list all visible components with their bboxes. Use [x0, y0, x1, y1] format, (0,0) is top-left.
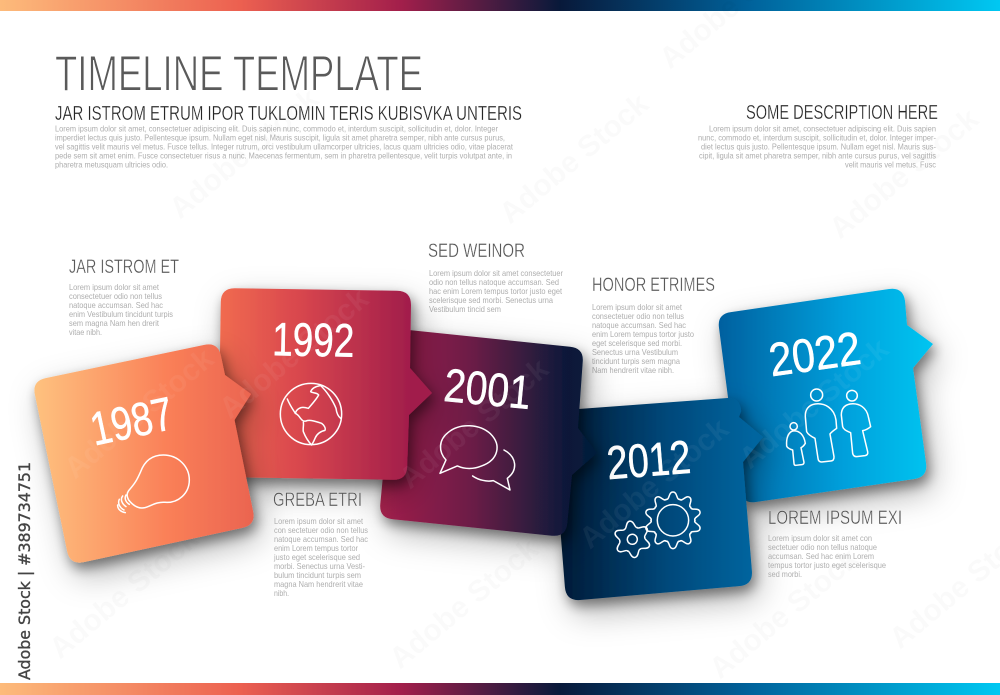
intro body text: vel sagittis velit mauris vel metus. Fusce tellus. Integer rutrum, orci vestibulum ullamcorper ultricies, lacus quam ultricies odio, vitae placerat [55, 142, 514, 152]
card 2022 [719, 289, 933, 502]
stock watermarks [58, 282, 895, 555]
stock watermarks: Adobe Stock [733, 332, 895, 475]
icon: globe [280, 383, 342, 445]
label: Sed Weinor: odio non tellus natoque accumsan. Sed [429, 277, 559, 287]
intro body text: pharetra metusquam ultricies odio. [55, 160, 168, 170]
label: Greba Etri: justo eget scelerisque sed [273, 552, 360, 562]
faint background watermarks: Adobe Stock [493, 87, 655, 230]
intro body text [55, 124, 514, 170]
year 1987: 1987 [85, 386, 178, 455]
label: Honor Etrimes: Senectus urna Vestibulum [592, 347, 678, 357]
label: Lorem Ipsum Exi: accumsan. Sed hac enim Lorem [768, 551, 874, 561]
year 2001: 2001 [442, 358, 533, 419]
intro body text: Lorem ipsum dolor sit amet, consectetuer adipiscing elit. Duis sapien nunc, commodo et, interdum suscipit, sollicitudin et, dolor. Integer [55, 124, 498, 134]
intro block [55, 102, 522, 170]
description body text: velit mauris vel metus. Fusc [845, 160, 936, 170]
stock watermarks: Adobe Stock [213, 282, 375, 425]
card 1987 [34, 344, 254, 563]
card shape 1987 [34, 344, 254, 563]
label: Honor Etrimes: Lorem ipsum dolor sit amet [592, 302, 683, 312]
label: Greba Etri [273, 490, 368, 598]
label: Greba Etri: natoque accumsan. Sed hac [274, 534, 368, 544]
label: Sed Weinor: SED WEINOR [428, 241, 525, 262]
faint background watermarks: Adobe Stock [823, 102, 985, 245]
label: Honor Etrimes: tincidunt turpis sem magna [592, 356, 680, 366]
card shape 1992 [218, 288, 432, 480]
label: Greba Etri: enim Lorem tempus tortor [274, 543, 358, 553]
card 2012 [552, 398, 763, 600]
label: Greba Etri: con sectetuer odio non tellus [274, 525, 368, 535]
card 2001 [380, 330, 597, 536]
label: Honor Etrimes: Nam hendrerit vitae nibh. [592, 365, 674, 375]
intro body text: pede sem sit amet enim. Fusce consectetuer risus a nunc. Maecenas fermentum, sem in pharetra pellentesque, velit turpis volutpat ante, in [55, 150, 512, 160]
label: Greba Etri: Lorem ipsum dolor sit amet [274, 516, 364, 526]
label: Jar Istrom Et: vitae nibh. [69, 327, 102, 337]
card shape 2022 [719, 289, 933, 502]
label: Lorem Ipsum Exi: LOREM IPSUM EXI [768, 508, 902, 529]
label: Jar Istrom Et: natoque accumsan. Sed hac [69, 300, 163, 310]
description body text: nunc, commodo et, interdum suscipit, sollicitudin et, dolor. Integer imper- [698, 132, 936, 142]
label: Jar Istrom Et: JAR ISTROM ET [69, 257, 179, 278]
description body text: Lorem ipsum dolor sit amet, consectetuer adipiscing elit. Duis sapien [709, 124, 936, 134]
label: Sed Weinor: scelerisque sed morbi. Senectus urna [429, 295, 553, 305]
icon: light bulb [118, 455, 189, 513]
icon: speech bubbles [440, 426, 515, 490]
intro body text: imperdiet lectus quis justo. Pellentesque ipsum. Nullam eget nisl. Mauris suscipit, ligula sit amet pharetra semper, nibh ante cursus purus, [55, 132, 505, 142]
icon: gears [611, 492, 702, 560]
label: Jar Istrom Et: Lorem ipsum dolor sit amet [69, 282, 160, 292]
intro subheading: JAR ISTROM ETRUM IPOR TUKLOMIN TERIS KUBISVKA UNTERIS [55, 102, 522, 125]
label: Lorem Ipsum Exi: tempus tortor justo eget scelerisque [768, 560, 886, 570]
faint background watermarks: Adobe Stock [163, 82, 325, 225]
label: Greba Etri: GREBA ETRI [273, 490, 362, 511]
faint background watermarks: Adobe Stock [43, 522, 205, 665]
label: Honor Etrimes: consectetuer odio non tellus [592, 311, 684, 321]
faint background watermarks: Adobe Stock [383, 532, 545, 675]
label: Lorem Ipsum Exi: sed morbi. [768, 569, 802, 579]
year 1992: 1992 [272, 312, 355, 367]
label: Jar Istrom Et [69, 257, 179, 337]
label: Honor Etrimes [592, 275, 715, 375]
label: Greba Etri: nibh. [274, 588, 289, 598]
title: TIMELINE TEMPLATE [55, 46, 423, 102]
description block [698, 101, 938, 170]
stock watermarks: Adobe Stock [393, 352, 555, 495]
label: Honor Etrimes: HONOR ETRIMES [592, 275, 715, 296]
card shape 2012 [552, 398, 763, 600]
label: Honor Etrimes: natoque accumsan. Sed hac [592, 320, 686, 330]
description body text [698, 124, 936, 170]
label: Sed Weinor: Vestibulum tincid sem [429, 304, 501, 314]
description body text: diet lectus quis justo. Pellentesque ipsum. Nullam eget nisl. Mauris sus- [701, 142, 936, 152]
label: Sed Weinor [428, 241, 563, 314]
label: Jar Istrom Et: consectetuer odio non tellus [69, 291, 162, 301]
top gradient bar [0, 0, 1000, 11]
year 2022: 2022 [765, 321, 864, 386]
label: Greba Etri: bulum tincidunt turpis sem [274, 570, 361, 580]
label: Lorem Ipsum Exi [768, 508, 902, 579]
label: Lorem Ipsum Exi: Lorem ipsum dolor sit amet con [768, 533, 872, 543]
faint background watermarks: Adobe Stock [703, 542, 865, 685]
label: Honor Etrimes: enim Lorem tempus tortor justo [592, 329, 694, 339]
card 1992 [218, 288, 432, 480]
stock watermarks: Adobe Stock [58, 342, 220, 485]
label: Greba Etri: morbi. Senectus urna Vesti- [274, 561, 365, 571]
stock id vertical text: Adobe Stock | #389734751 [15, 462, 34, 680]
label: Jar Istrom Et: enim Vestibulum tincidunt turpis [69, 309, 173, 319]
label: Honor Etrimes: eget scelerisque sed morbi. [592, 338, 682, 348]
bottom gradient bar [0, 683, 1000, 695]
year 2012: 2012 [605, 430, 693, 489]
label: Jar Istrom Et: sem magna Nam hen drerit [69, 318, 160, 328]
description body text: cipit, ligula sit amet pharetra semper, nibh ante cursus purus, vel sagittis [699, 150, 936, 160]
stock watermarks: Adobe Stock [573, 412, 735, 555]
card shape 2001 [380, 330, 597, 536]
label: Greba Etri: magna Nam hendrerit vitae [274, 579, 363, 589]
label: Sed Weinor: hac enim Lorem tempus tortor justo eget [429, 286, 563, 296]
label: Sed Weinor: Lorem ipsum dolor sit amet consectetuer [429, 268, 563, 278]
label: Lorem Ipsum Exi: sectetuer odio non tellus natoque [768, 542, 877, 552]
icon: family [787, 389, 871, 465]
